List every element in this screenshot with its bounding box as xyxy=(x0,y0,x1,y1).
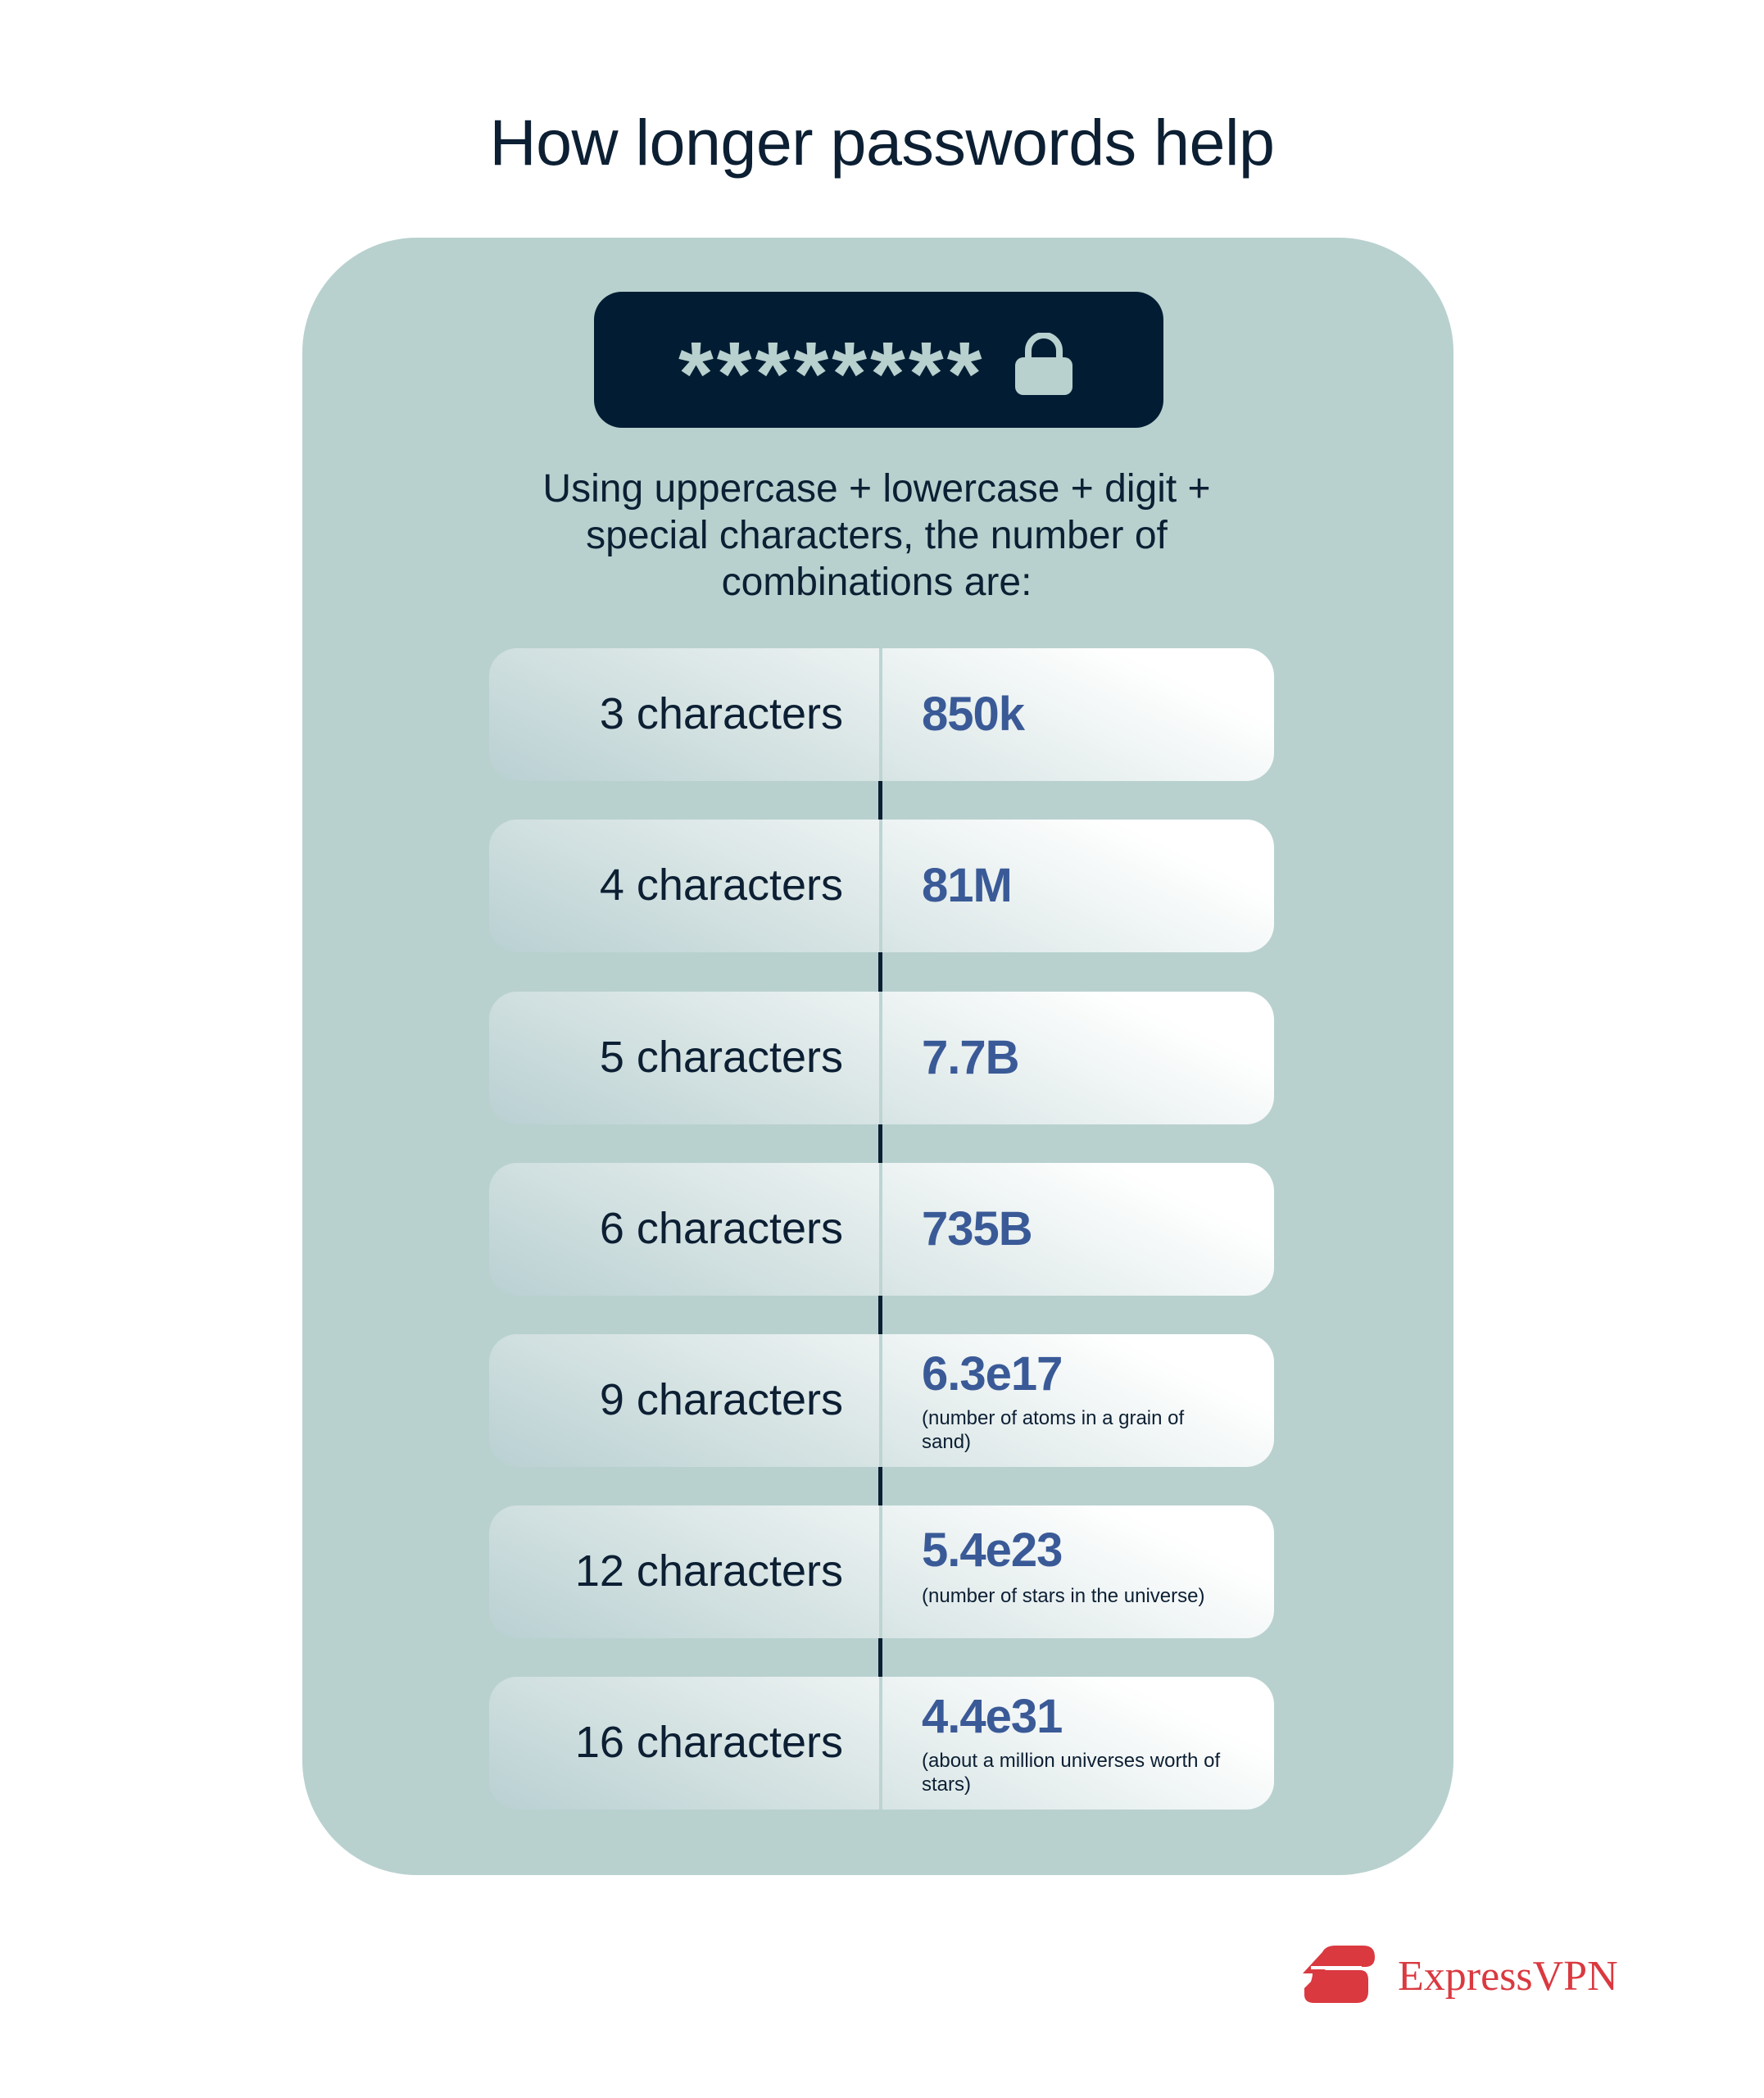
row: 3 characters: 3 characters xyxy=(600,689,843,738)
icon: lock xyxy=(1015,333,1072,395)
row: 9 characters xyxy=(489,1334,1274,1467)
row: 16 characters: 4.4e31 xyxy=(922,1690,1062,1743)
row: 4 characters: 81M xyxy=(922,859,1012,912)
subtitle text: combinations are: xyxy=(722,561,1032,604)
row: 3 characters: 850k xyxy=(922,688,1024,741)
asterisks: ******** xyxy=(678,324,985,425)
row: 5 characters: 7.7B xyxy=(922,1031,1019,1084)
logo: ExpressVPN xyxy=(1303,1946,1618,2003)
panel: main xyxy=(302,238,1453,1875)
row: 12 characters: 5.4e23 xyxy=(922,1524,1062,1577)
row: 9 characters: 6.3e17 xyxy=(922,1347,1062,1401)
connector line xyxy=(878,781,882,1678)
row: 16 characters xyxy=(489,1677,1274,1810)
subtitle text: special characters, the number of xyxy=(586,514,1168,557)
row: 6 characters xyxy=(489,1163,1274,1296)
subtitle text xyxy=(542,467,1211,604)
row: 12 characters: (number of stars in the universe) xyxy=(922,1585,1204,1607)
row: 16 characters: (about a million universes worth of stars) xyxy=(922,1750,1220,1796)
row: 12 characters xyxy=(489,1505,1274,1638)
icon: logo mark xyxy=(1303,1946,1375,2003)
row: 5 characters: 5 characters xyxy=(600,1033,843,1082)
row: 6 characters: 6 characters xyxy=(600,1204,843,1253)
row: 3 characters xyxy=(489,648,1274,781)
logo text: ExpressVPN xyxy=(1398,1953,1618,2000)
title: How longer passwords help xyxy=(490,106,1274,179)
password field xyxy=(594,292,1163,428)
row: 12 characters: 12 characters xyxy=(575,1546,843,1596)
row: 5 characters xyxy=(489,992,1274,1124)
row: 6 characters: 735B xyxy=(922,1202,1032,1256)
subtitle text: Using uppercase + lowercase + digit + xyxy=(542,467,1211,511)
row: 4 characters xyxy=(489,820,1274,952)
row: 9 characters: (number of atoms in a grain of sand) xyxy=(922,1407,1184,1453)
row: 4 characters: 4 characters xyxy=(600,861,843,910)
row: 9 characters: 9 characters xyxy=(600,1375,843,1424)
row: 16 characters: 16 characters xyxy=(575,1718,843,1767)
